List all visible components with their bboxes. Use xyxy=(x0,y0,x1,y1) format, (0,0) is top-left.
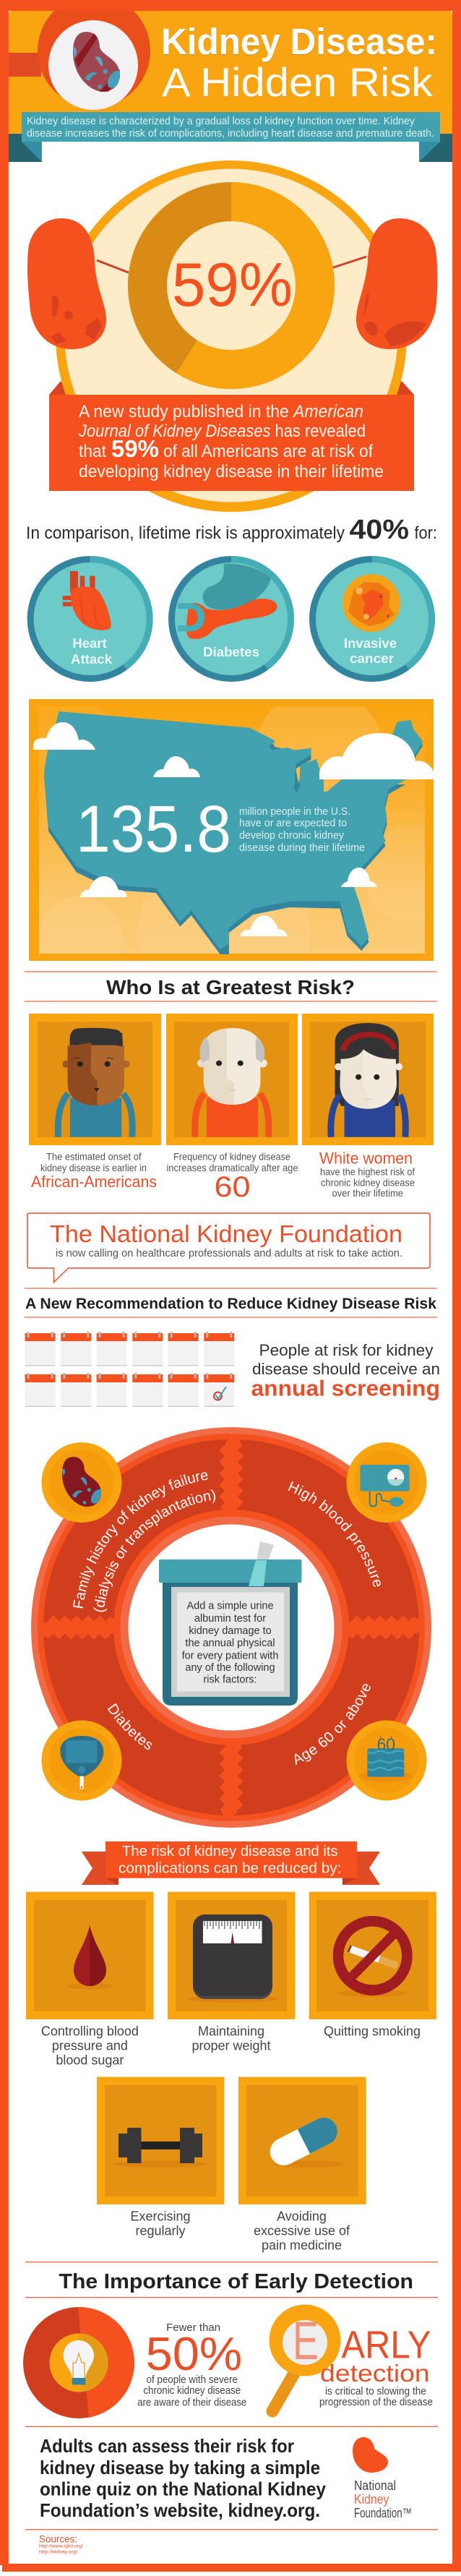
icon: urine specimen jar: albumin test for xyxy=(194,1613,266,1625)
risk factor ring xyxy=(31,1427,431,1828)
icon: blood drop xyxy=(66,1925,113,1990)
call to action: online quiz on the National Kidney xyxy=(40,2478,327,2500)
icon: urine specimen jar xyxy=(159,1541,302,1706)
caption: avoiding pain medicine: excessive use of xyxy=(254,2224,350,2238)
caption: white women: over their lifetime xyxy=(332,1187,403,1199)
icon: heart xyxy=(63,571,111,630)
callout: National Kidney Foundation: is now calling on healthcare professionals and adults at risk to take action. xyxy=(56,1248,402,1259)
icon: left kidney xyxy=(27,218,106,349)
sources: Sources: xyxy=(39,2533,77,2545)
icon: checkmark xyxy=(214,1387,226,1400)
sources: http://www.ajkd.org/ xyxy=(39,2545,83,2549)
caption: exercising: Exercising xyxy=(130,2209,191,2224)
icon: urine specimen jar: Add a simple urine xyxy=(186,1601,274,1612)
caption: white women xyxy=(319,1150,415,1199)
comparison heading: In comparison, lifetime risk is approximately xyxy=(26,523,345,543)
icon: urine specimen jar: kidney damage to xyxy=(189,1625,272,1637)
panel: blood pressure and sugar: Controlling blood xyxy=(41,2024,139,2039)
icon: urine specimen jar: any of the following xyxy=(185,1662,275,1674)
icon: birthday cake badge: 60 xyxy=(377,1735,395,1754)
caption: avoiding pain medicine xyxy=(254,2209,350,2253)
title: A Hidden Risk xyxy=(162,59,434,105)
caption: white women: White women xyxy=(319,1150,413,1167)
circle: heart attack: Heart xyxy=(72,636,107,651)
early detection graphic xyxy=(269,2305,433,2411)
ring labels: Age 60 or above xyxy=(295,1684,371,1766)
ribbon side folds xyxy=(9,134,452,162)
ring labels: Diabetes xyxy=(107,1703,152,1750)
icon: kidney badge xyxy=(42,1442,121,1523)
study callout box: developing kidney disease in their lifetime xyxy=(79,462,384,482)
map caption: develop chronic kidney xyxy=(239,829,344,842)
panel: older man xyxy=(166,1014,298,1145)
panel: proper weight: proper weight xyxy=(191,2039,271,2053)
icon: magnifying glass xyxy=(269,2305,341,2411)
comparison heading: for: xyxy=(415,523,437,543)
circle: diabetes: Diabetes xyxy=(203,644,259,659)
study callout box: of all Americans are at risk of xyxy=(163,442,373,461)
header banner xyxy=(9,11,452,162)
stat: fewer than 50%: of people with severe xyxy=(146,2374,238,2386)
heading: new recommendation: A New Recommendation to Reduce Kidney Disease Risk xyxy=(25,1296,436,1312)
map of USA xyxy=(44,711,423,954)
ribbon: risk can be reduced: The risk of kidney disease and its xyxy=(122,1844,338,1860)
early detection graphic: ARLY xyxy=(341,2324,431,2367)
logo: National Kidney Foundation: National xyxy=(354,2478,396,2493)
early detection graphic: detection xyxy=(320,2360,430,2387)
map caption: million people in the U.S. xyxy=(239,805,350,818)
caption: age 60: increases dramatically after age xyxy=(166,1162,298,1173)
early detection graphic: progression of the disease xyxy=(319,2396,433,2408)
panel: blood pressure and sugar: blood sugar xyxy=(56,2053,124,2068)
study callout box: A new study published in the American xyxy=(79,402,363,422)
title xyxy=(161,21,437,105)
intro ribbon: Kidney disease is characterized by a gradual loss of kidney function over time. Kidney xyxy=(27,116,415,127)
panel: African-American man xyxy=(29,1014,161,1145)
caption: avoiding pain medicine: pain medicine xyxy=(262,2238,342,2253)
heading: early detection: The Importance of Early Detection xyxy=(59,2270,413,2293)
panel: pain medicine xyxy=(238,2077,366,2204)
panel: proper weight xyxy=(168,1892,295,2053)
circle: invasive cancer: Invasive xyxy=(344,636,397,651)
panel: quit smoking xyxy=(309,1892,436,2039)
icon: light bulb xyxy=(64,2340,94,2384)
study callout box: that xyxy=(79,442,106,461)
callout: National Kidney Foundation xyxy=(27,1213,430,1283)
circle: diabetes xyxy=(168,556,294,682)
study callout box: Journal of Kidney Diseases has revealed xyxy=(78,422,366,441)
icon: stomach and pancreas xyxy=(178,564,277,639)
clouds xyxy=(33,722,434,936)
caption: African-Americans: The estimated onset of xyxy=(46,1151,142,1163)
call to action xyxy=(40,2435,327,2521)
panel: blood pressure and sugar xyxy=(26,1892,154,2068)
annual screening text: annual screening xyxy=(251,1375,440,1401)
heading: who is at greatest risk: Who Is at Greatest Risk? xyxy=(106,976,355,998)
stat: fewer than 50%: Fewer than xyxy=(166,2322,220,2334)
icon: right kidney xyxy=(356,218,437,349)
circle: invasive cancer: cancer xyxy=(350,651,394,666)
map caption: have or are expected to xyxy=(239,817,347,829)
stat: fewer than 50%: 50% xyxy=(146,2327,242,2380)
caption: age 60 xyxy=(166,1151,298,1203)
59% dial xyxy=(27,161,437,512)
caption: African-Americans xyxy=(31,1151,157,1191)
ring labels: High blood pressure xyxy=(288,1481,381,1587)
ring labels xyxy=(73,1472,381,1766)
caption: African-Americans: kidney disease is earlier in xyxy=(40,1162,147,1173)
call to action: Foundation’s website, kidney.org. xyxy=(40,2499,320,2521)
study callout box: 59% xyxy=(111,435,159,462)
icon: dumbbell xyxy=(113,2128,207,2168)
connector lines xyxy=(97,257,366,273)
circle: invasive cancer xyxy=(309,556,435,682)
panel: exercise xyxy=(97,2077,224,2204)
calendars xyxy=(25,1332,234,1407)
stat: fewer than 50%: are aware of their disease xyxy=(137,2396,246,2408)
ribbon: risk can be reduced xyxy=(82,1841,380,1885)
panel: US map statistic xyxy=(29,699,434,961)
icon: birthday cake badge xyxy=(347,1721,426,1800)
donut chart: 59 percent xyxy=(128,182,335,389)
annual screening text xyxy=(251,1341,440,1401)
comparison heading: 40% xyxy=(350,515,409,545)
callout: National Kidney Foundation: The National Kidney Foundation xyxy=(50,1220,402,1247)
caption: avoiding pain medicine: Avoiding xyxy=(277,2209,327,2224)
logo: National Kidney Foundation: Foundation™ xyxy=(354,2506,412,2520)
annual screening text: disease should receive an xyxy=(252,1360,440,1378)
call to action: Adults can assess their risk for xyxy=(40,2435,294,2457)
panel: white woman xyxy=(302,1014,434,1145)
divider lines xyxy=(25,972,438,2530)
comparison heading xyxy=(26,515,437,545)
icon: pill xyxy=(265,2113,344,2170)
icon: cancer cell xyxy=(342,574,400,632)
ribbon: risk can be reduced: complications can be reduced by: xyxy=(119,1861,341,1877)
map caption xyxy=(239,805,365,854)
logo: National Kidney Foundation: Kidney xyxy=(354,2492,389,2507)
sources xyxy=(39,2533,83,2555)
caption: exercising xyxy=(130,2209,191,2238)
intro ribbon xyxy=(22,112,440,142)
circle: heart attack xyxy=(27,556,153,682)
title: Kidney Disease: xyxy=(161,21,437,62)
caption: African-Americans: African-Americans xyxy=(31,1173,157,1191)
map caption: disease during their lifetime xyxy=(239,842,365,854)
logo: National Kidney Foundation xyxy=(353,2437,412,2520)
sources: http://kidney.org/ xyxy=(39,2551,77,2555)
icon: bathroom scale xyxy=(187,1914,278,2003)
icon: no smoking xyxy=(338,1921,408,1997)
stat: fewer than 50%: chronic kidney disease xyxy=(143,2384,241,2397)
icon: blood pressure monitor badge xyxy=(347,1442,426,1523)
study callout box xyxy=(49,395,414,491)
caption: age 60: Frequency of kidney disease xyxy=(173,1151,290,1163)
big number: 59% xyxy=(172,251,293,320)
circle: heart attack: Attack xyxy=(71,651,113,667)
caption: white women: have the highest risk of xyxy=(320,1165,415,1177)
ring labels: (dialysis or transplantation) xyxy=(93,1489,215,1612)
icon: urine specimen jar: risk factors: xyxy=(203,1674,257,1686)
intro ribbon: disease increases the risk of complications, including heart disease and premature death. xyxy=(27,128,434,140)
ring labels: Family history of kidney failure xyxy=(73,1472,208,1608)
icon: urine specimen jar: the annual physical xyxy=(185,1638,275,1649)
icon: glucose meter badge xyxy=(42,1721,121,1800)
icon: magnifier on kidney xyxy=(9,11,150,110)
icon: urine specimen jar: for every patient with xyxy=(182,1650,278,1661)
call to action: kidney disease by taking a simple xyxy=(40,2457,320,2478)
early detection graphic: is critical to slowing the xyxy=(325,2385,426,2397)
caption: age 60: 60 xyxy=(214,1171,250,1203)
donut chart: awareness with light bulb xyxy=(23,2307,134,2418)
panel: proper weight: Maintaining xyxy=(198,2024,264,2039)
caption: exercising: regularly xyxy=(135,2224,186,2238)
big number: 135.8 xyxy=(76,792,231,866)
icon: magnifying glass: E xyxy=(293,2311,319,2371)
panel: quit smoking: Quitting smoking xyxy=(324,2024,421,2039)
stat: fewer than 50% xyxy=(137,2322,246,2408)
panel: blood pressure and sugar: pressure and xyxy=(52,2039,128,2053)
caption: white women: chronic kidney disease xyxy=(321,1177,415,1189)
annual screening text: People at risk for kidney xyxy=(259,1341,434,1359)
